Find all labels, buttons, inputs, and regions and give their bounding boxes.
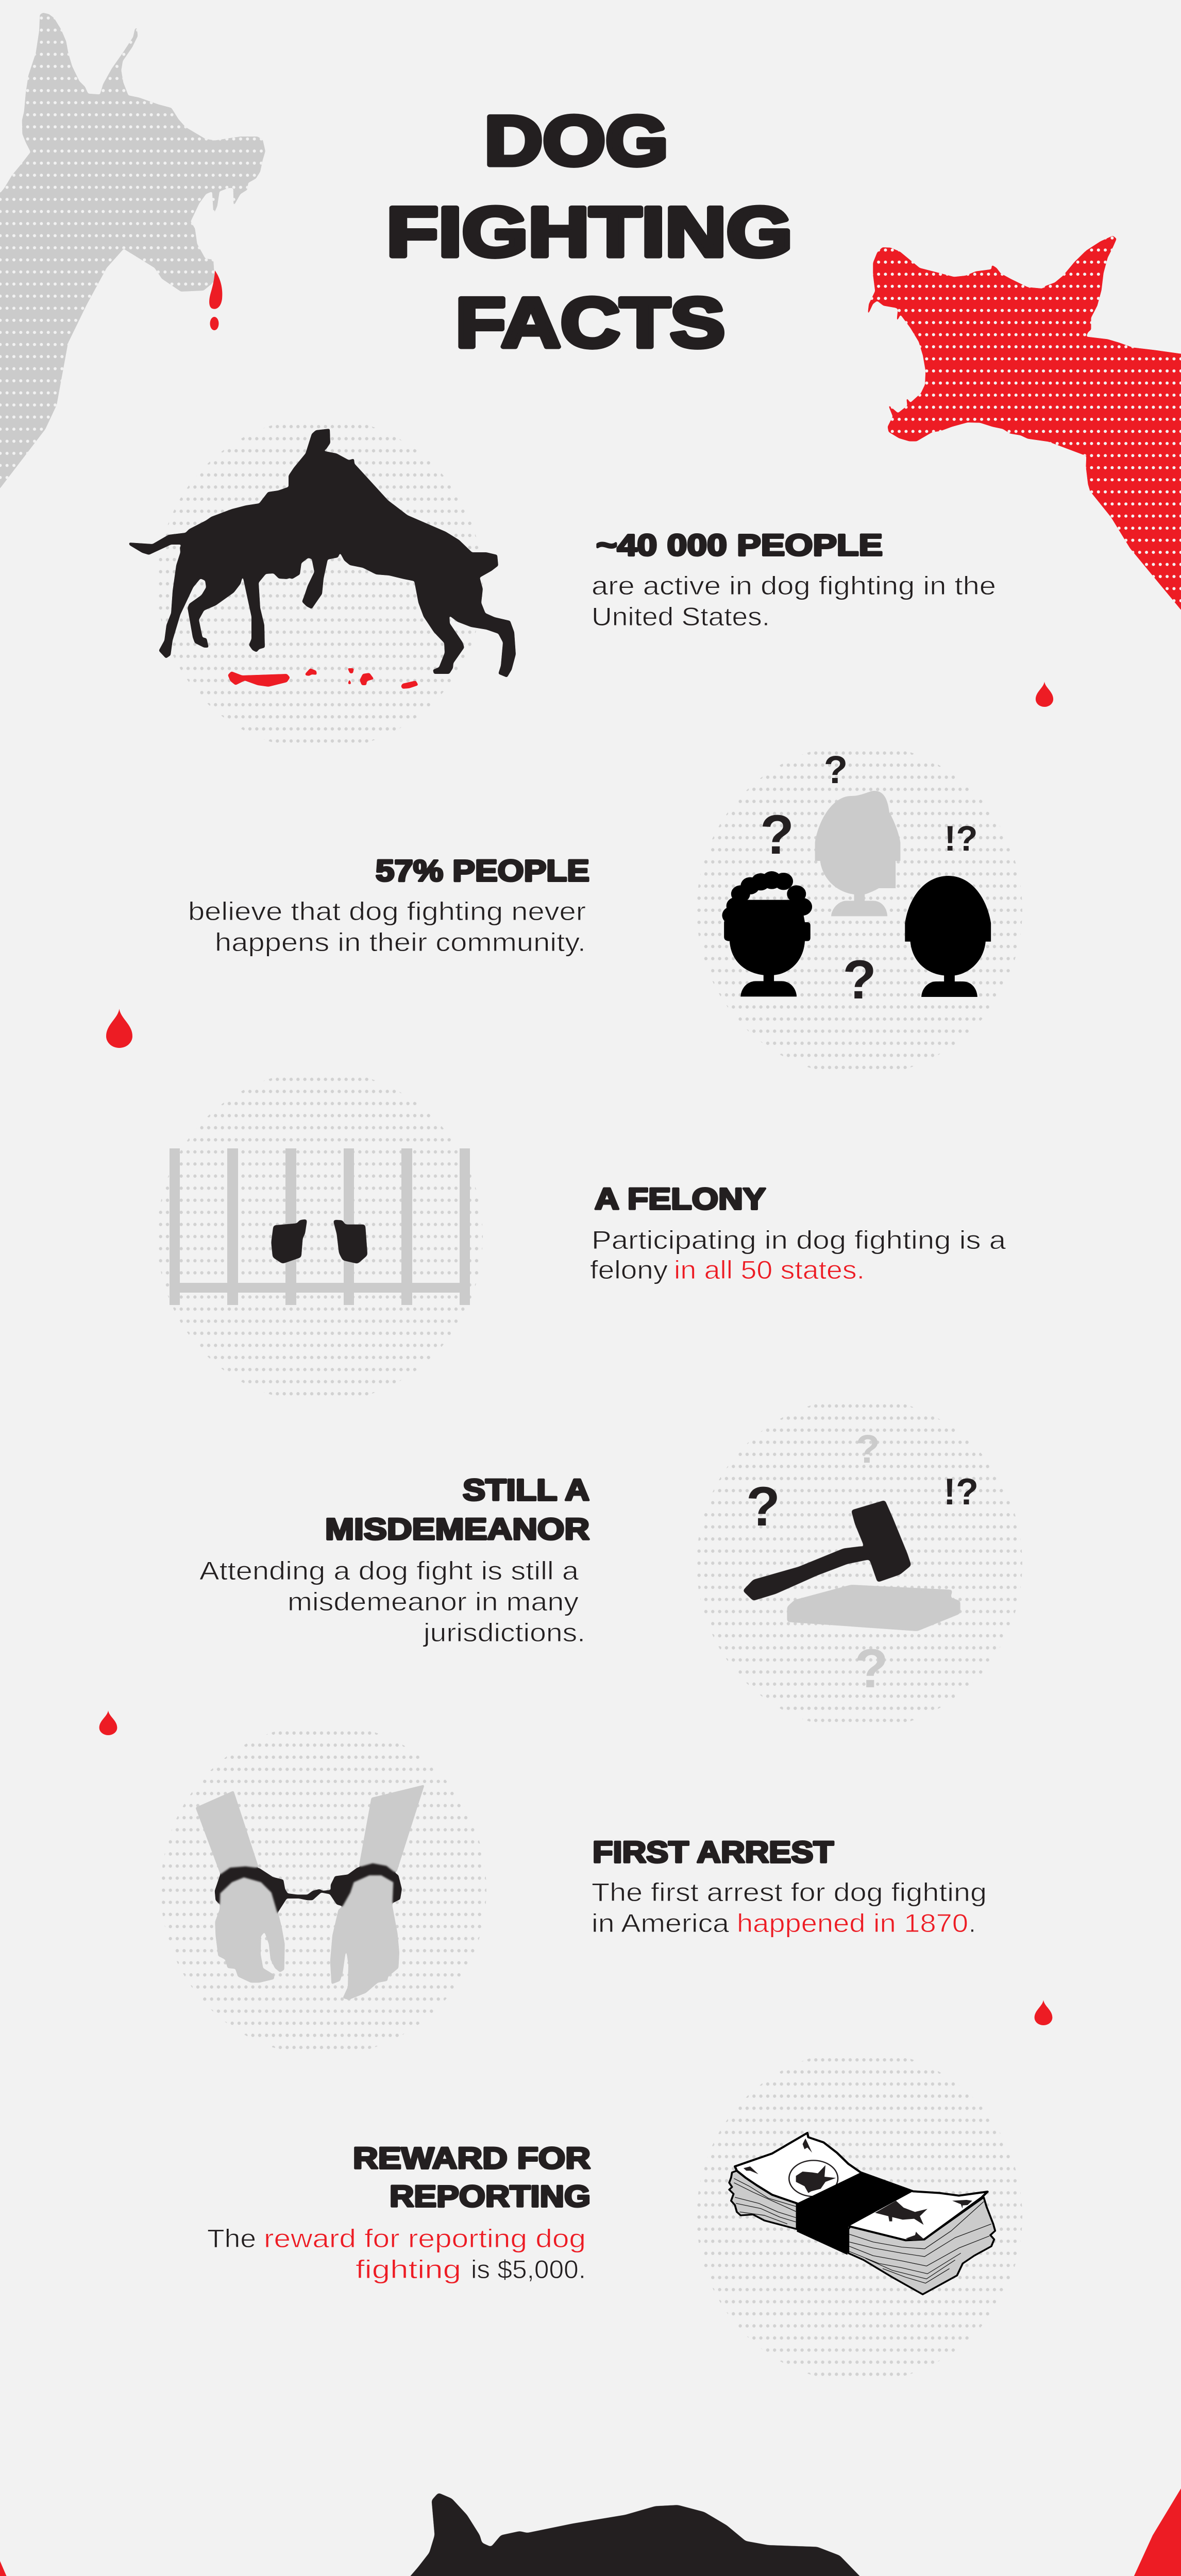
body text: is $5,000. [471,2255,586,2284]
panel: still a misdemeanor [199,1398,1022,1730]
icon: blood drop left lower [99,1710,117,1735]
question marks: ? [746,1475,780,1537]
illustration: stack of money [729,2133,995,2294]
body text [199,1556,585,1647]
illustration: bald person silhouette [905,876,991,997]
panel: a felony [157,1071,1006,1402]
illustration: two fighting dogs [129,429,516,677]
question marks: !? [943,1471,978,1513]
body text: reward for reporting dog [264,2224,586,2253]
heading: STILL A [463,1473,589,1507]
title: FACTS [455,283,725,362]
heading: REPORTING [390,2180,590,2213]
body text [592,571,996,631]
illustration: fists on bars [271,1219,367,1264]
body text [590,1226,1006,1284]
body text [592,1878,987,1938]
body text: The first arrest for dog fighting [592,1878,987,1907]
icon: blood drop left [106,1009,132,1048]
dotted circle [157,418,483,750]
illustration: gavel [743,1500,960,1631]
illustration: grey person silhouette [815,791,900,916]
heading: REWARD FOR [353,2142,590,2175]
dotted circle [697,744,1022,1076]
body text: fighting [356,2255,461,2284]
title [386,101,792,362]
dotted circle [161,1724,486,2056]
illustration: person with curly hair [722,871,812,996]
illustration: red snarling dog [855,227,1181,622]
body text: are active in dog fighting in the [592,571,996,600]
body text: The [207,2224,256,2253]
body text: happened in 1870 [737,1909,968,1938]
question marks: ? [855,1427,880,1471]
panel: 40 000 people [129,418,996,750]
panel: 57% people [188,744,1022,1076]
body text: believe that dog fighting never [188,897,586,926]
question marks: ? [842,948,876,1010]
panel: reward for reporting [207,2050,1022,2382]
body text: in America [592,1909,729,1938]
illustration: prison bars [170,1148,470,1305]
icon: blood drop right [1036,682,1053,707]
body text: jurisdictions. [423,1618,585,1647]
dotted circle [697,1398,1022,1730]
red blood pool footer [0,2488,1181,2576]
body text: Attending a dog fight is still a [199,1556,579,1585]
heading: ~40 000 PEOPLE [596,529,883,562]
title: DOG [484,101,668,180]
body text: . [969,1909,976,1938]
body text: Participating in dog fighting is a [592,1226,1006,1255]
heading: FIRST ARREST [593,1836,834,1869]
title: FIGHTING [386,193,792,271]
panel: first arrest [161,1724,987,2056]
heading [325,1473,589,1546]
body text: misdemeanor in many [288,1587,579,1616]
heading: 57% PEOPLE [376,854,589,888]
question marks: ? [824,748,848,792]
heading: MISDEMEANOR [325,1513,589,1546]
body text: happens in their community. [215,928,586,957]
dotted circle [157,1071,483,1402]
question marks [760,748,978,1010]
body text: felony [590,1256,668,1284]
body text [188,897,586,957]
heading: A FELONY [595,1182,766,1216]
illustration: handcuffed hands [195,1785,425,2000]
heading [353,2142,590,2213]
illustration: grey snarling dog with dripping blood [0,0,268,498]
illustration: dog lying down [373,2493,896,2576]
question marks: ? [854,1637,888,1699]
question marks: !? [944,819,978,858]
dotted circle [697,2050,1022,2382]
body text: in all 50 states. [674,1256,865,1284]
question marks [746,1427,978,1699]
body text: United States. [592,602,770,631]
body text [207,2224,586,2284]
blood splatter [228,666,418,689]
question marks: ? [760,803,794,866]
icon: blood drop right lower [1035,2000,1052,2025]
